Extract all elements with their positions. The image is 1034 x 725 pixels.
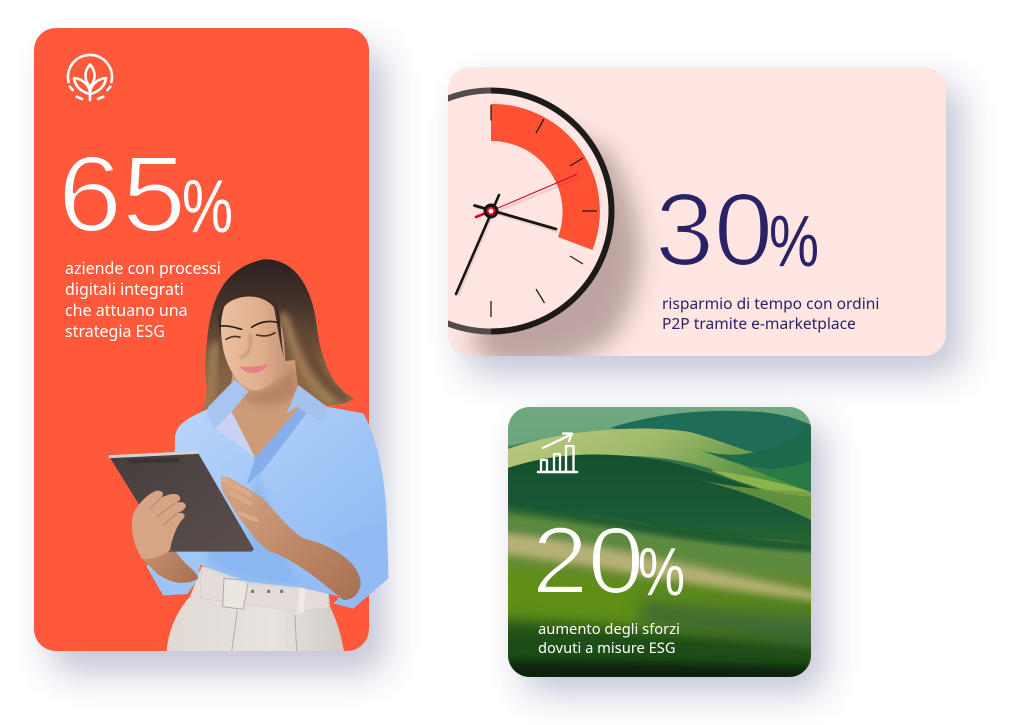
neck and chest	[228, 360, 300, 460]
eyes and brows	[221, 321, 278, 329]
text: 20% description: dovuti a misure ESG	[538, 638, 676, 658]
hand over tablet	[132, 491, 186, 559]
tablet	[109, 452, 254, 552]
text: 65% description: che attuano una	[65, 299, 188, 321]
nose shadow	[240, 333, 251, 357]
icon: rising bar chart	[538, 434, 577, 472]
left arm	[132, 526, 198, 583]
finger separations	[150, 498, 177, 525]
icon: leaf in circle	[68, 55, 112, 100]
belt	[200, 567, 328, 612]
big number: 65%: 65	[58, 133, 186, 254]
chart: orange time wedge	[491, 104, 600, 250]
right hand and forearm	[221, 476, 361, 600]
big number: 20%: 20	[532, 508, 644, 614]
left cuff	[147, 567, 198, 595]
big number: 65%: %	[182, 164, 233, 248]
lips	[239, 363, 268, 373]
shirt	[147, 407, 388, 608]
face	[221, 296, 285, 390]
text: 30% description: risparmio di tempo con ordini	[662, 292, 879, 314]
image: green hills	[508, 407, 811, 677]
big number: 30%	[655, 172, 819, 287]
hair back	[201, 259, 354, 413]
panel: pink card with clock	[368, 67, 962, 374]
big number: 30%: %	[769, 202, 819, 282]
big number: 30%: 30	[655, 172, 773, 287]
shirt shading	[207, 470, 300, 585]
text: 65% description: strategia ESG	[65, 320, 165, 342]
collar	[207, 379, 248, 428]
hair parting over forehead	[217, 294, 284, 357]
text: 30% description: P2P tramite e-marketplace	[662, 312, 856, 334]
cuff and placket	[332, 518, 388, 608]
illustration: woman with tablet	[109, 259, 388, 652]
trousers	[167, 567, 344, 652]
text: 65% description: aziende con processi	[65, 257, 221, 279]
panel: orange card	[34, 28, 385, 673]
big number: 65%	[58, 133, 233, 254]
text: 65% description: digitali integrati	[65, 278, 184, 300]
big number: 20%: %	[638, 534, 685, 610]
chart: clock	[448, 88, 654, 356]
clock hands	[456, 174, 576, 294]
text: 20% description: aumento degli sforzi	[538, 619, 680, 639]
big number: 20%	[532, 508, 685, 614]
right hand fingers	[224, 480, 257, 520]
hair streaks	[206, 317, 345, 407]
panel: green card	[470, 407, 850, 700]
